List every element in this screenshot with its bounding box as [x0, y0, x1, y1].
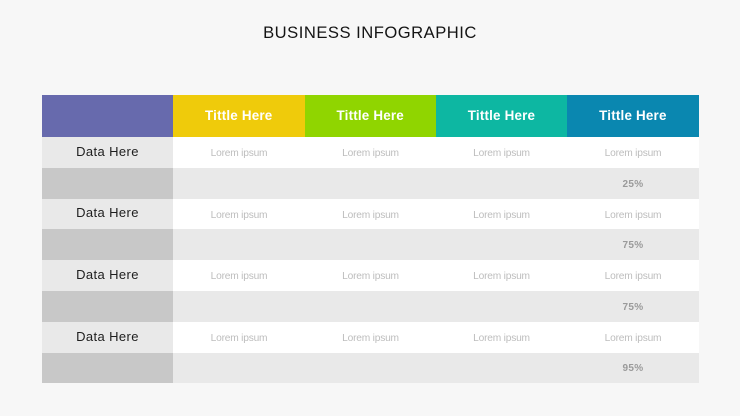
row 3 cell 4: Lorem ipsum — [605, 271, 661, 282]
header: column 1 — [173, 95, 304, 137]
header: column 4: Tittle Here — [599, 108, 667, 123]
row 2 cell 4: Lorem ipsum — [605, 210, 661, 221]
row 4 cell 1: Lorem ipsum — [211, 333, 267, 344]
row 2 white band — [173, 199, 699, 229]
row 4 percent: 95% — [623, 363, 643, 374]
row 1 cell 4: Lorem ipsum — [605, 148, 661, 159]
row 4 cell 2: Lorem ipsum — [342, 333, 399, 344]
row 1 label cell — [42, 137, 173, 168]
row 1 cell 3: Lorem ipsum — [473, 148, 530, 159]
header: column 2 — [304, 95, 436, 137]
row 1 label: Data Here — [76, 144, 139, 159]
row 1 cell 2: Lorem ipsum — [342, 148, 399, 159]
row 4 cell 3: Lorem ipsum — [473, 333, 530, 344]
row 3 percent: 75% — [623, 302, 643, 313]
row 1 white band — [173, 137, 699, 168]
row 4 cell 4: Lorem ipsum — [605, 333, 661, 344]
row 3 grey band — [173, 291, 699, 322]
header: column 2: Tittle Here — [337, 108, 404, 123]
row 4 label: Data Here — [76, 329, 139, 344]
header: column 3 — [436, 95, 567, 137]
table — [42, 95, 699, 383]
row 4 label cell — [42, 322, 173, 353]
row 4 white band — [173, 322, 699, 353]
row 2 grey band — [173, 229, 699, 260]
row 3 label cell — [42, 260, 173, 291]
row 4 shaded label cell — [42, 353, 173, 383]
row 3 cell 3: Lorem ipsum — [473, 271, 530, 282]
header: column 4 — [567, 95, 699, 137]
row 2 percent: 75% — [623, 240, 643, 251]
row 2 label: Data Here — [76, 205, 139, 220]
row 2 shaded label cell — [42, 229, 173, 260]
row 1 shaded label cell — [42, 168, 173, 199]
header: column 1: Tittle Here — [205, 108, 272, 123]
row 3 label: Data Here — [76, 267, 139, 282]
row 3 white band — [173, 260, 699, 291]
row 3 cell 2: Lorem ipsum — [342, 271, 399, 282]
row 1 percent: 25% — [623, 179, 643, 190]
row 2 cell 1: Lorem ipsum — [211, 210, 267, 221]
row 4 grey band — [173, 353, 699, 383]
row 1 cell 1: Lorem ipsum — [211, 148, 267, 159]
row 2 cell 3: Lorem ipsum — [473, 210, 530, 221]
row 2 cell 2: Lorem ipsum — [342, 210, 399, 221]
header: blank purple cell — [42, 95, 173, 137]
row 2 label cell — [42, 199, 173, 229]
row 3 cell 1: Lorem ipsum — [211, 271, 267, 282]
header: column 3: Tittle Here — [468, 108, 535, 123]
row 3 shaded label cell — [42, 291, 173, 322]
row 1 grey band — [173, 168, 699, 199]
title: BUSINESS INFOGRAPHIC — [263, 22, 477, 42]
